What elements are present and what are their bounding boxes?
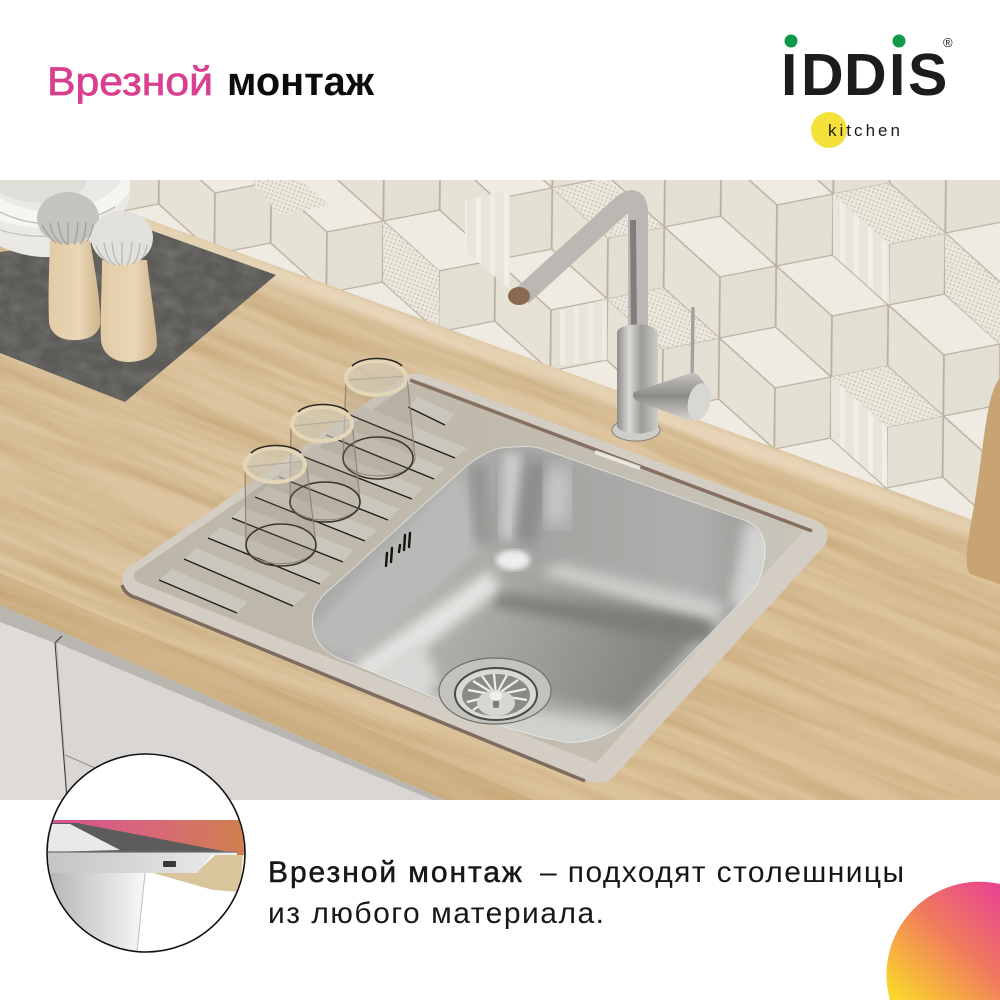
caption text — [268, 856, 904, 930]
sink — [122, 374, 828, 783]
logo: IDDIS kitchen: ® — [943, 35, 953, 50]
drain strainer — [439, 658, 551, 724]
drying glasses — [245, 358, 415, 566]
pepper mill left — [37, 192, 100, 340]
title: Врезной монтаж — [47, 60, 375, 104]
rim shadow line bottom-left — [122, 585, 585, 781]
faucet lever rod — [692, 307, 693, 388]
inset: sink edge detail circle — [47, 754, 245, 952]
title: Врезной монтаж: Врезной — [47, 60, 213, 104]
inner deck — [134, 382, 806, 763]
drainer ribs — [159, 397, 467, 613]
logo: IDDIS kitchen: IDDIS — [781, 42, 947, 108]
cutting board — [967, 378, 1000, 584]
stacked white plates — [0, 180, 130, 257]
title: Врезной монтаж: монтаж — [227, 60, 375, 104]
faucet handle — [633, 372, 708, 420]
caption text: из любого материала. — [268, 897, 604, 930]
glass 3 — [343, 358, 415, 479]
faucet — [508, 200, 714, 441]
chipboard edge — [153, 855, 243, 892]
faucet base ring — [612, 422, 660, 442]
sink rim profile — [47, 852, 237, 873]
bowl wall — [47, 873, 145, 952]
logo: IDDIS kitchen — [781, 34, 953, 148]
basin — [312, 446, 766, 743]
tiled wall — [124, 180, 1000, 520]
rim highlight — [595, 452, 640, 468]
caption text: – подходят столешницы — [540, 856, 904, 889]
glass 1 — [245, 446, 316, 566]
rim slot — [163, 861, 176, 867]
kitchen photo — [0, 180, 1000, 800]
rim channel top-right — [410, 380, 812, 531]
faucet spout — [522, 200, 638, 340]
countertop — [0, 210, 1000, 800]
corner gradient circle — [886, 882, 1000, 1000]
countertop section — [48, 820, 244, 855]
steel lip — [48, 823, 233, 853]
glass 2 — [290, 404, 360, 522]
base cabinets — [0, 605, 445, 800]
faucet body — [617, 324, 658, 434]
stone mat — [0, 230, 276, 402]
pepper mill right — [91, 211, 157, 362]
overflow slots — [386, 533, 410, 566]
caption text: Врезной монтаж — [268, 856, 522, 889]
sink rim — [122, 374, 828, 783]
logo: IDDIS kitchen: kitchen — [828, 121, 900, 140]
